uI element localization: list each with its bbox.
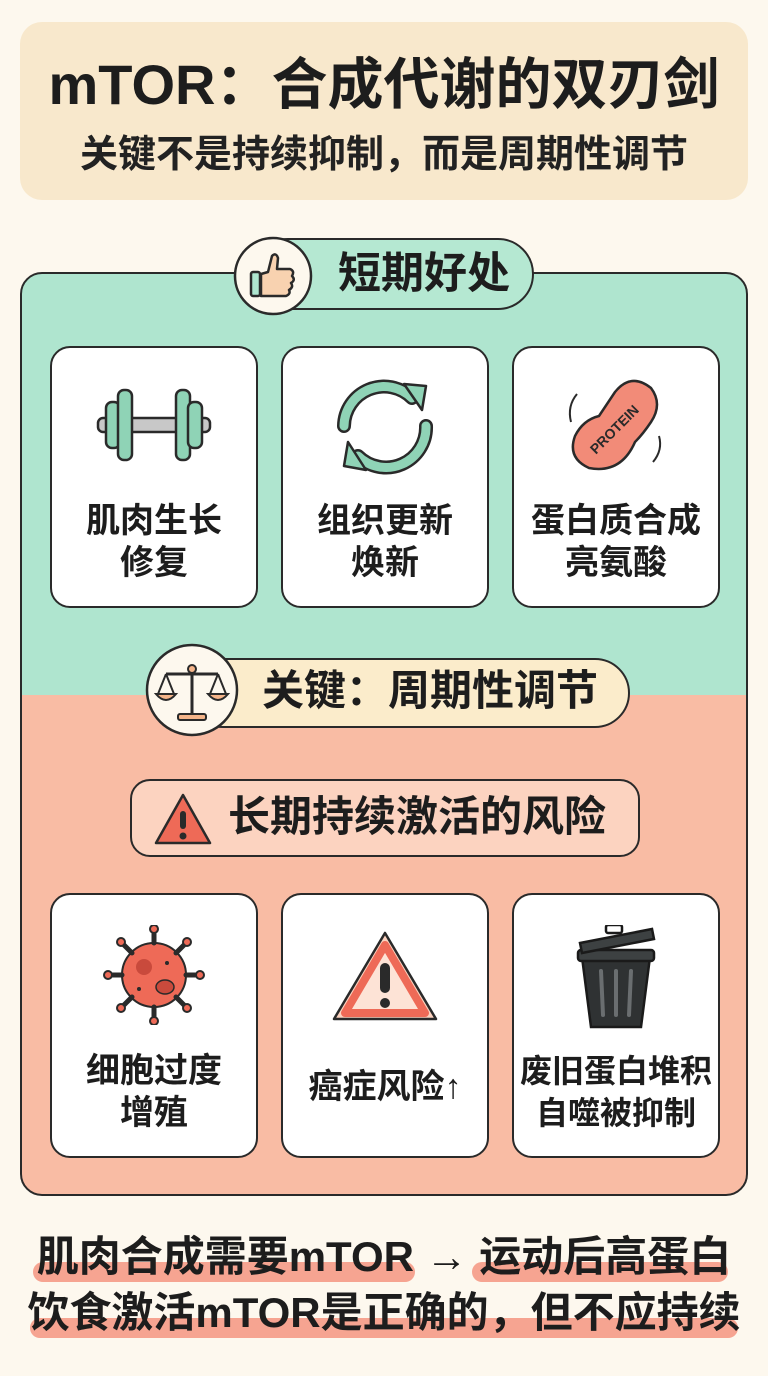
card: muscle growth: 修复 [120,544,188,582]
icon: protein bean [568,380,662,470]
bottom conclusion: 肌肉合成需要mTOR → 运动后高蛋白 [37,1233,731,1280]
card: waste protein accumulation: 自噬被抑制 [536,1095,696,1131]
icon: refresh arrows [337,380,434,474]
card: tissue renewal: 组织更新 [317,502,453,540]
card: cell overgrowth: 细胞过度 [86,1052,222,1090]
main panel [20,272,748,1196]
icon: thumbs up [234,236,312,316]
card: waste protein accumulation: 废旧蛋白堆积 [520,1053,712,1089]
card: protein synthesis [512,346,720,608]
badge: short-term benefits [234,236,534,316]
icon: warning triangle large [332,932,438,1020]
icon: trash can [576,925,656,1028]
card: cancer risk: 癌症风险↑ [308,1068,462,1106]
badge: short-term benefits: 短期好处 [338,250,510,298]
badge: key periodic regulation [146,644,630,736]
icon: warning triangle [154,794,212,844]
card: muscle growth [50,346,258,608]
title: mTOR：合成代谢的双刃剑 [48,53,720,116]
card: cell overgrowth: 增殖 [120,1094,188,1132]
icon: dumbbell [96,388,212,462]
icon: balance scale [146,644,238,736]
subtitle: 关键不是持续抑制，而是周期性调节 [80,134,688,176]
card: cancer risk [281,893,489,1158]
icon: cell [103,925,205,1025]
bottom conclusion: 饮食激活mTOR是正确的，但不应持续 [27,1289,741,1336]
icon: protein bean: PROTEIN [587,402,642,457]
badge: key periodic regulation: 关键：周期性调节 [262,667,598,714]
card: tissue renewal: 焕新 [351,544,419,582]
card: muscle growth: 肌肉生长 [86,502,222,540]
badge: long-term risk: 长期持续激活的风险 [228,793,606,840]
card: waste protein accumulation [512,893,720,1158]
card: protein synthesis: 蛋白质合成 [531,502,701,540]
badge: long-term risk [130,779,640,857]
card: tissue renewal [281,346,489,608]
card: protein synthesis: 亮氨酸 [565,544,667,582]
bottom conclusion [27,1233,741,1338]
card: cell overgrowth [50,893,258,1158]
header box [20,22,748,200]
